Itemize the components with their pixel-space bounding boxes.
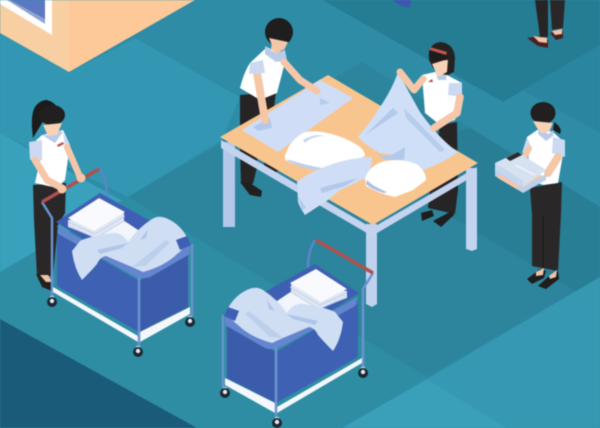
worker pushing cart — [29, 100, 80, 291]
arms — [35, 160, 62, 188]
worker with sheet, arms — [400, 72, 460, 128]
laundry cart center — [220, 240, 373, 428]
folded stack — [498, 171, 544, 188]
table apron — [221, 140, 477, 236]
person: standing legs at top — [527, 0, 565, 48]
table top — [220, 75, 478, 225]
folded white towel — [365, 160, 426, 197]
trousers — [530, 182, 562, 271]
hair and face — [32, 100, 58, 138]
shoes — [36, 274, 53, 291]
shirt — [527, 128, 565, 185]
worker with folded stack — [495, 102, 565, 289]
wall corner — [0, 0, 195, 72]
trousers — [33, 183, 66, 276]
hands on cart handle — [58, 174, 86, 194]
laundry cart left — [42, 169, 195, 357]
big held sheet — [358, 72, 458, 172]
table legs — [223, 142, 477, 307]
person: worker behind table, body — [240, 18, 293, 197]
blue object at top edge — [392, 0, 411, 8]
head — [553, 122, 561, 134]
worker behind table, arms — [249, 60, 317, 120]
shoes — [527, 269, 546, 284]
shirt — [29, 130, 70, 188]
arm — [548, 157, 558, 173]
flat sheet on table — [242, 80, 353, 152]
draped sheet on table — [297, 157, 372, 215]
table — [220, 75, 478, 307]
person: worker with sheet, body — [421, 42, 462, 227]
white towel — [285, 131, 365, 170]
